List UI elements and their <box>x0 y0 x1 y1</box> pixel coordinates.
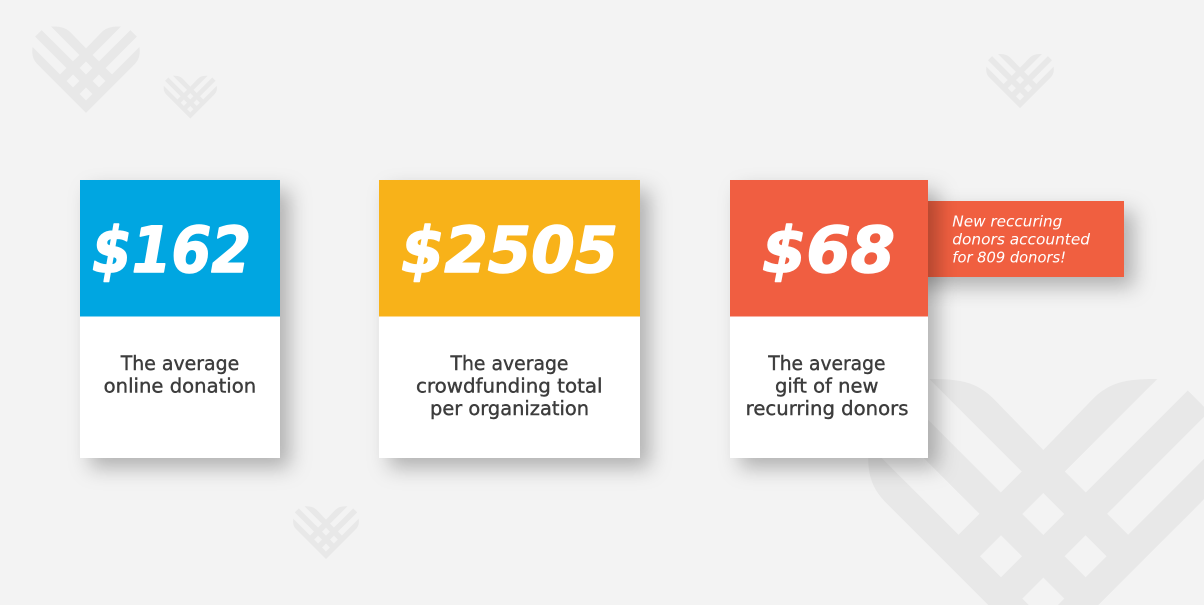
description: recurring donors <box>746 397 908 420</box>
description: gift of new <box>775 375 878 398</box>
description: The average <box>450 352 568 375</box>
description <box>416 352 602 420</box>
amount: $2505 <box>401 214 618 287</box>
blue header <box>80 180 280 316</box>
amount: $68 <box>762 214 895 287</box>
panel: average crowdfunding total <box>379 180 640 458</box>
red header <box>730 180 928 316</box>
description: The average <box>767 352 886 375</box>
icon: small heart top left <box>164 76 217 118</box>
description: per organization <box>430 397 589 420</box>
callout text: New reccuring <box>952 213 1063 231</box>
description: online donation <box>104 375 256 398</box>
description: crowdfunding total <box>416 375 602 398</box>
amount: $162 <box>92 214 251 287</box>
description <box>746 352 908 420</box>
description: The average <box>120 352 239 375</box>
icon: heart bottom centre <box>293 506 359 559</box>
description <box>104 352 256 398</box>
icon: large heart bottom right <box>868 379 1204 605</box>
callout text: donors accounted <box>952 230 1090 248</box>
callout text <box>952 213 1090 266</box>
panel: average gift of new recurring donors <box>730 180 928 458</box>
icon: heart top left <box>32 27 140 113</box>
panel: average online donation <box>80 180 280 458</box>
callout text: for 809 donors! <box>952 248 1066 266</box>
card background <box>80 180 280 458</box>
callout background <box>900 201 1124 277</box>
callout: new recurring donors <box>900 201 1124 277</box>
yellow header <box>379 180 640 316</box>
icon: heart top right <box>986 54 1054 108</box>
card background <box>379 180 640 458</box>
card background <box>730 180 928 458</box>
